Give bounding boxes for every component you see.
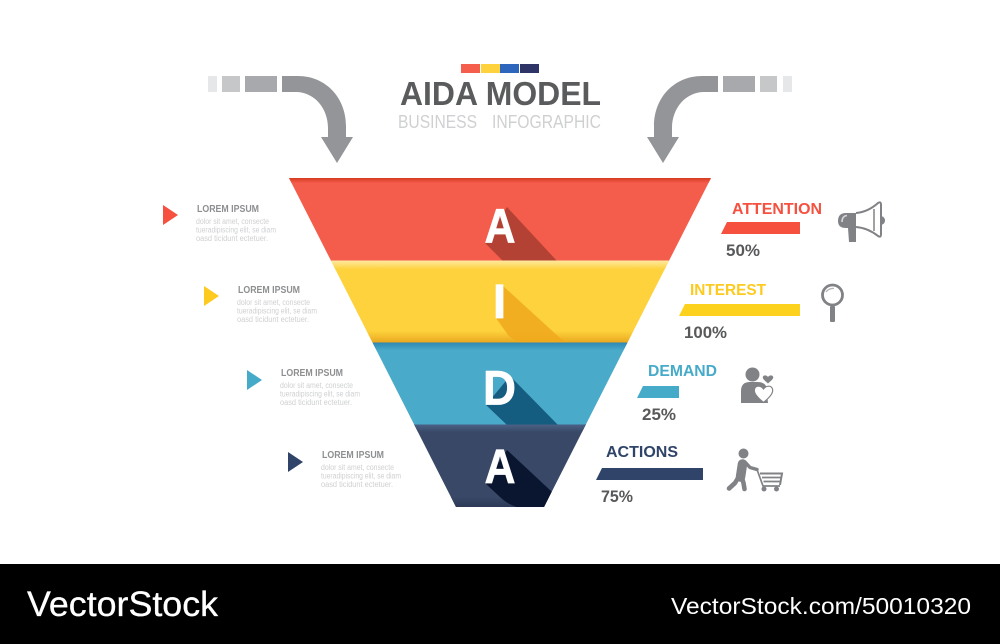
right item: attention: ATTENTION [732, 201, 822, 218]
funnel band: demand [372, 342, 628, 426]
funnel band: actions [414, 424, 586, 507]
arrow: left curved [208, 76, 353, 163]
right item: interest: 100% [684, 324, 727, 342]
left item: actions: oasd ticidunt ectetuer. [321, 480, 393, 489]
right item: interest [679, 282, 800, 342]
left item: demand: tueradipiscing elit, se diam [280, 390, 360, 398]
left item: demand: oasd ticidunt ectetuer. [280, 398, 352, 407]
left item: demand [247, 367, 360, 407]
left item: interest: LOREM IPSUM [238, 284, 300, 296]
icon: person with shopping cart [729, 448, 782, 492]
left item: actions [288, 449, 401, 489]
funnel letters [483, 200, 516, 494]
funnel letters: A [484, 200, 516, 254]
subtitle [398, 111, 601, 132]
subtitle: BUSINESS [398, 111, 477, 132]
left item: actions: dolor sit amet, consecte [321, 463, 394, 472]
left item: actions: tueradipiscing elit, se diam [321, 472, 401, 480]
right item: attention: 50% [726, 242, 760, 260]
left item: interest: dolor sit amet, consecte [237, 298, 310, 307]
funnel letters: D [483, 362, 516, 416]
left item: demand: dolor sit amet, consecte [280, 381, 353, 390]
title: AIDA MODEL [400, 75, 601, 112]
left item: interest: oasd ticidunt ectetuer. [237, 315, 309, 324]
funnel letters: A [484, 441, 516, 494]
funnel band: attention [280, 178, 720, 261]
left item: interest: tueradipiscing elit, se diam [237, 306, 317, 316]
arrow: right curved [647, 76, 792, 163]
right item: actions: ACTIONS [606, 444, 678, 461]
right item: actions: 75% [601, 488, 633, 506]
right item: attention [721, 201, 822, 260]
subtitle: INFOGRAPHIC [492, 111, 601, 132]
footer bar [0, 564, 1000, 644]
right item: demand: 25% [642, 406, 676, 424]
icon: megaphone [838, 202, 885, 242]
funnel [280, 178, 720, 508]
left item: demand: LOREM IPSUM [281, 367, 343, 379]
title colour bar [461, 64, 539, 73]
funnel band: interest [330, 260, 670, 343]
left item: actions: LOREM IPSUM [322, 449, 384, 461]
right item: interest: INTEREST [690, 282, 766, 299]
funnel letters: I [493, 276, 506, 329]
left item: attention: oasd ticidunt ectetuer. [196, 234, 268, 243]
left item: attention [163, 203, 276, 243]
right item: demand: DEMAND [648, 363, 717, 380]
right item: demand [637, 363, 717, 424]
footer url: VectorStock.com/50010320 [671, 593, 971, 619]
left item: attention: dolor sit amet, consecte [196, 217, 269, 226]
left item: attention: tueradipiscing elit, se diam [196, 226, 276, 234]
left item: interest [204, 284, 317, 324]
right item: actions [596, 444, 703, 506]
left item: attention: LOREM IPSUM [197, 203, 259, 215]
footer logo: VectorStock [27, 585, 219, 624]
icon: magnifier [822, 285, 842, 322]
icon: person with hearts [741, 368, 773, 403]
